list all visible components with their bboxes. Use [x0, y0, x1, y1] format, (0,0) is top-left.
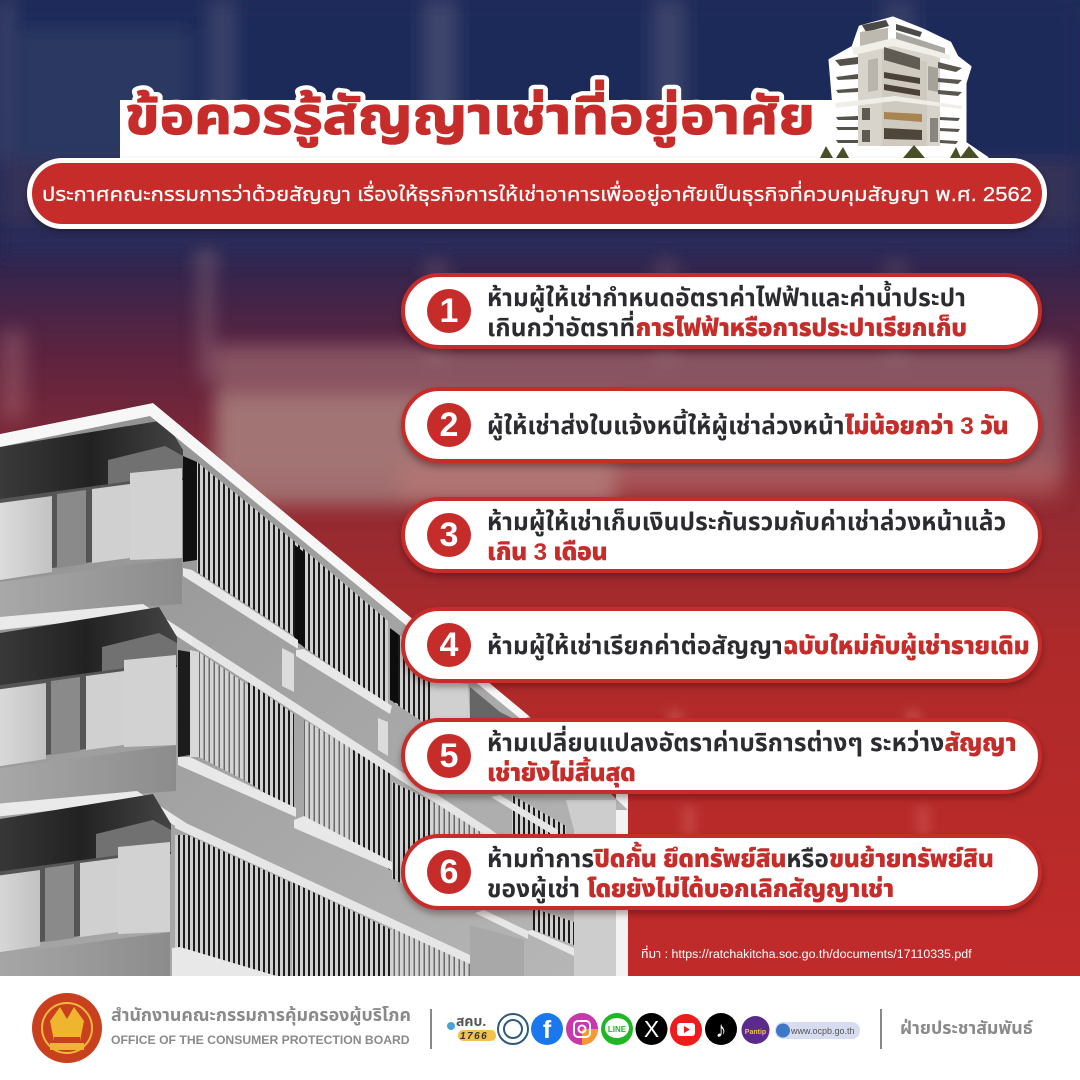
floor two — [0, 607, 186, 833]
rule 6 text: ของผู้เช่า โดยยังไม่ได้บอกเลิกสัญญาเช่า — [487, 876, 894, 903]
rule 5 text: เช่ายังไม่สิ้นสุด — [487, 760, 636, 787]
icon: line: LINE — [608, 1025, 627, 1034]
blurred window shapes — [0, 0, 1080, 836]
icon: x — [636, 1013, 668, 1045]
icon: youtube — [670, 1014, 702, 1046]
number 2 — [427, 403, 471, 447]
hotline 1766: สคบ. — [456, 1013, 486, 1029]
subtitle banner — [27, 158, 1047, 229]
card 1 — [401, 273, 1042, 349]
rule 6 text — [487, 842, 994, 904]
title: ข้อควรรู้สัญญาเช่าที่อยู่อาศัย — [125, 80, 815, 148]
rule 4 text: ห้ามผู้ให้เช่าเรียกค่าต่อสัญญาฉบับใหม่กับผู้เช่ารายเดิม — [487, 633, 1029, 660]
icon: tiktok: ♪ — [716, 1017, 726, 1042]
title: ข้อควรรู้สัญญาเช่าที่อยู่อาศัย — [125, 80, 815, 148]
number 5: 5 — [440, 737, 458, 775]
rule 1 text — [487, 280, 967, 342]
hotline 1766: 1766 — [460, 1031, 488, 1042]
upper slat panels — [183, 456, 520, 756]
roof edge — [0, 403, 530, 720]
number 2: 2 — [440, 406, 458, 444]
rule 3 text: ห้ามผู้ให้เช่าเก็บเงินประกันรวมกับค่าเช่าล่วงหน้าแล้ว — [487, 509, 1006, 536]
rule 1 text: เกินกว่าอัตราที่การไฟฟ้าหรือการประปาเรียกเก็บ — [487, 315, 967, 342]
card 3 — [401, 497, 1042, 573]
number 1 — [427, 289, 471, 333]
department label: ฝ่ายประชาสัมพันธ์ — [900, 1018, 1033, 1038]
white strip beside building — [616, 790, 628, 976]
title white plate — [120, 100, 835, 162]
rule 2 text: ผู้ให้เช่าส่งใบแจ้งหนี้ให้ผู้เช่าล่วงหน้าไม่น้อยกว่า 3 วัน — [487, 413, 1008, 440]
rule 5 text — [487, 726, 1016, 788]
floor three — [0, 794, 171, 976]
rule 6 text: ห้ามทำการปิดกั้น ยึดทรัพย์สินหรือขนย้ายทรัพย์สิน — [487, 846, 994, 873]
icon: OCPB — [498, 1014, 528, 1044]
left balconies — [835, 57, 858, 143]
agency name Thai: สำนักงานคณะกรรมการคุ้มครองผู้บริโภค — [111, 1005, 411, 1025]
card 4 — [401, 607, 1042, 683]
number 3 — [427, 513, 471, 557]
icon: facebook: f — [543, 1016, 552, 1044]
agency name Thai — [111, 1005, 411, 1047]
building wall — [0, 403, 628, 976]
social icons row — [447, 1013, 860, 1046]
lower slat panels — [172, 818, 574, 980]
rule 1 text: ห้ามผู้ให้เช่ากำหนดอัตราค่าไฟฟ้าและค่าน้ำประปา — [487, 285, 966, 312]
number 5 — [427, 734, 471, 778]
number 6: 6 — [440, 853, 458, 891]
right balconies — [938, 62, 962, 144]
divider — [430, 1009, 432, 1049]
hotline 1766 — [447, 1013, 496, 1042]
card 5 — [401, 718, 1042, 794]
number 1: 1 — [440, 292, 458, 330]
apartment tower illustration — [820, 18, 987, 158]
card 6 — [401, 834, 1042, 910]
icon: facebook — [531, 1013, 563, 1045]
number 4: 4 — [440, 626, 458, 664]
website pill: www.ocpb.go.th — [790, 1026, 855, 1036]
rule 3 text: เกิน 3 เดือน — [487, 539, 607, 566]
logo: consumer protection board seal — [32, 993, 102, 1063]
icon: x: X — [644, 1016, 659, 1042]
card 2 — [401, 387, 1042, 463]
agency name Thai: OFFICE OF THE CONSUMER PROTECTION BOARD — [111, 1033, 410, 1047]
number 6 — [427, 850, 471, 894]
icon: pantip: Pantip — [745, 1029, 766, 1036]
icon: instagram — [566, 1013, 598, 1045]
footer — [0, 976, 1080, 1080]
icon: tiktok — [705, 1013, 737, 1045]
black and white building photo — [0, 403, 628, 1020]
subtitle banner: ประกาศคณะกรรมการว่าด้วยสัญญา เรื่องให้ธุรกิจการให้เช่าอาคารเพื่ออยู่อาศัยเป็นธุรกิจที่ควบคุมสัญญา พ.ศ. 2562 — [42, 180, 1032, 207]
website pill — [775, 1022, 860, 1039]
divider — [880, 1009, 882, 1049]
number 3: 3 — [440, 516, 458, 554]
rule 5 text: ห้ามเปลี่ยนแปลงอัตราค่าบริการต่างๆ ระหว่างสัญญา — [487, 730, 1016, 757]
icon: pantip — [742, 1016, 770, 1044]
icon: line — [601, 1013, 633, 1045]
middle slat panels — [178, 636, 616, 976]
number 4 — [427, 623, 471, 667]
floor one — [0, 420, 192, 646]
source note: ที่มา : https://ratchakitcha.soc.go.th/documents/17110335.pdf — [641, 947, 972, 961]
rule 3 text — [487, 508, 1006, 566]
